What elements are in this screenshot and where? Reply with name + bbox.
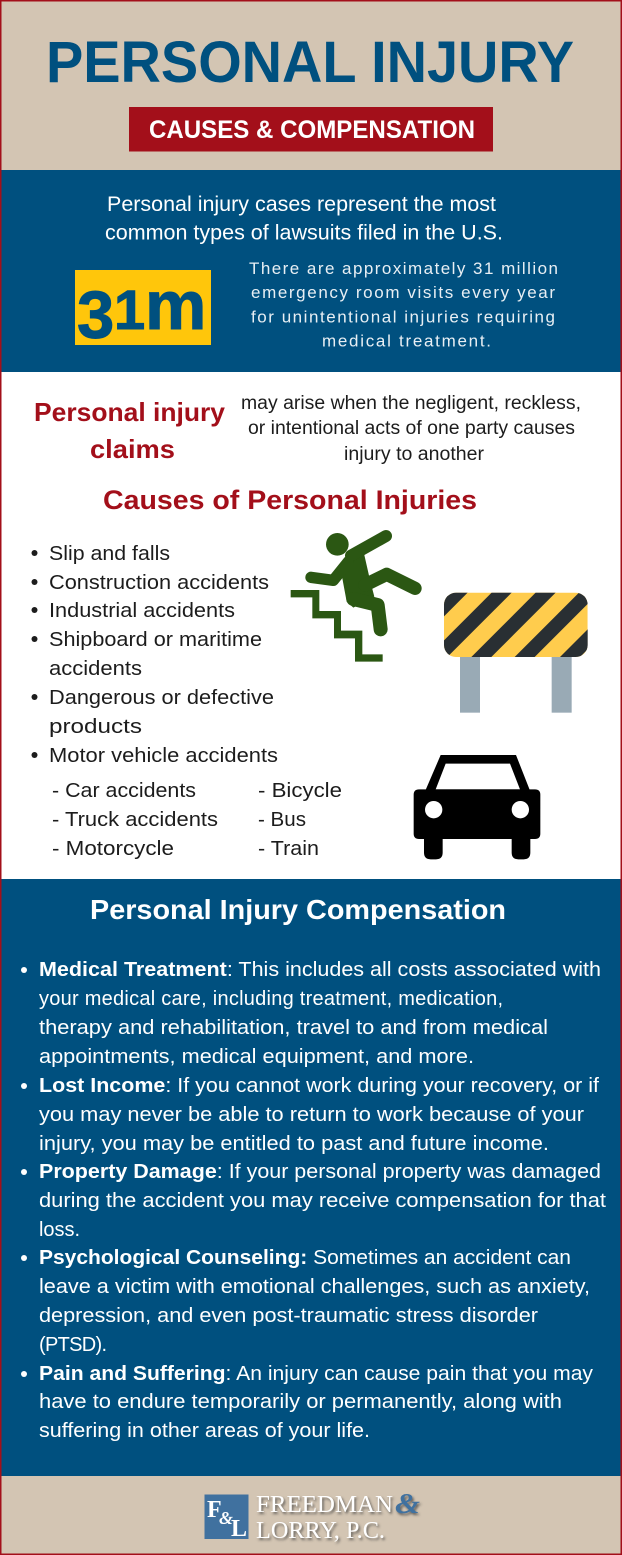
claims heading: claims [90, 434, 175, 464]
causes heading: Causes of Personal Injuries [103, 485, 477, 515]
icon: car [414, 755, 540, 859]
icon: road barrier [444, 592, 588, 713]
causes list: Shipboard or maritime [49, 629, 262, 651]
stat description: medical treatment. [322, 332, 491, 350]
motor vehicle sub-list: - Train [258, 838, 319, 860]
claims heading: Personal injury [34, 397, 226, 427]
subtitle banner [129, 107, 493, 152]
claims description: may arise when the negligent, reckless, [241, 393, 581, 414]
panel: intro statistics [0, 170, 622, 372]
causes list: accidents [49, 658, 142, 680]
item: lost income: injury, you may be entitled to past and future income. [39, 1133, 549, 1155]
intro text [105, 193, 503, 244]
title: PERSONAL INJURY [46, 30, 574, 95]
item: medical treatment: Medical Treatment : This includes all costs associated with [39, 959, 601, 981]
causes list: Motor vehicle accidents [49, 745, 278, 767]
logo: Freedman & Lorry: F [207, 1497, 222, 1523]
item: psychological counseling [39, 1247, 590, 1356]
panel: footer [0, 1476, 622, 1555]
item: pain and suffering: have to endure temporarily or permanently, along with [39, 1391, 562, 1413]
motor vehicle sub-list: - Bicycle [258, 780, 342, 802]
logo: Freedman & Lorry: & [219, 1508, 233, 1528]
logo: Freedman & Lorry: LORRY, P.C. [256, 1518, 385, 1544]
stat description: emergency room visits every year [251, 283, 555, 302]
item: pain and suffering [39, 1363, 593, 1442]
stat box: 31m: 3 [77, 278, 114, 353]
intro text: Personal injury cases represent the most [107, 193, 496, 216]
item: medical treatment: therapy and rehabilitation, travel to and from medical [39, 1017, 548, 1039]
claims description [241, 393, 581, 465]
causes list: Slip and falls [49, 543, 170, 565]
causes list: Industrial accidents [49, 600, 235, 622]
item: psychological counseling: (PTSD). [39, 1334, 107, 1356]
subtitle banner: CAUSES & COMPENSATION [149, 116, 475, 144]
claims heading [34, 397, 226, 464]
item: property damage: loss. [39, 1219, 80, 1241]
item: lost income: Lost Income : If you cannot work during your recovery, or if [39, 1075, 599, 1097]
panel: causes [32, 395, 588, 860]
item: property damage: during the accident you may receive compensation for that [39, 1190, 606, 1212]
stat box: 31m: 1 [114, 278, 145, 341]
motor vehicle sub-list: - Truck accidents [52, 809, 218, 831]
motor vehicle sub-list [52, 780, 342, 860]
item: medical treatment: appointments, medical equipment, and more. [39, 1046, 474, 1068]
motor vehicle sub-list: - Bus [258, 809, 306, 831]
compensation heading: Personal Injury Compensation [90, 894, 506, 925]
panel: compensation [0, 879, 622, 1476]
stat box: 31m: m [145, 267, 206, 344]
item: property damage: Property Damage : If your personal property was damaged [39, 1161, 601, 1183]
causes list: Construction accidents [49, 572, 269, 594]
causes list [32, 543, 278, 767]
stat box: 31m [75, 267, 211, 353]
bullet markers [21, 967, 27, 1377]
item: psychological counseling: depression, and even post-traumatic stress disorder [39, 1305, 538, 1327]
logo: Freedman & Lorry: & [395, 1488, 420, 1520]
claims description: or intentional acts of one party causes [248, 418, 575, 439]
motor vehicle sub-list: - Car accidents [52, 780, 196, 802]
stat description [249, 259, 558, 350]
panel: header [0, 0, 622, 170]
logo: Freedman & Lorry: L [231, 1516, 247, 1542]
item: psychological counseling: Psychological Counseling: Sometimes an accident can [39, 1247, 571, 1269]
item: psychological counseling: leave a victim with emotional challenges, such as anxiety, [39, 1276, 590, 1298]
item: lost income: you may never be able to return to work because of your [39, 1104, 584, 1126]
causes list: products [49, 716, 142, 738]
item: lost income [39, 1075, 599, 1155]
logo: Freedman & Lorry [204, 1488, 420, 1544]
item: medical treatment [39, 959, 601, 1068]
icon: person falling on stairs [291, 533, 415, 662]
claims description: injury to another [344, 444, 485, 465]
stat description: for unintentional injuries requiring [251, 308, 555, 326]
motor vehicle sub-list: - Motorcycle [52, 838, 174, 860]
item: pain and suffering: Pain and Suffering : An injury can cause pain that you may [39, 1363, 593, 1385]
item: property damage [39, 1161, 606, 1241]
intro text: common types of lawsuits filed in the U.S. [105, 222, 503, 244]
causes list: Dangerous or defective [49, 687, 274, 709]
stat description: There are approximately 31 million [249, 259, 558, 278]
logo: Freedman & Lorry: FREEDMAN [256, 1492, 393, 1518]
item: medical treatment: your medical care, including treatment, medication, [39, 988, 503, 1010]
item: pain and suffering: suffering in other areas of your life. [39, 1420, 370, 1442]
